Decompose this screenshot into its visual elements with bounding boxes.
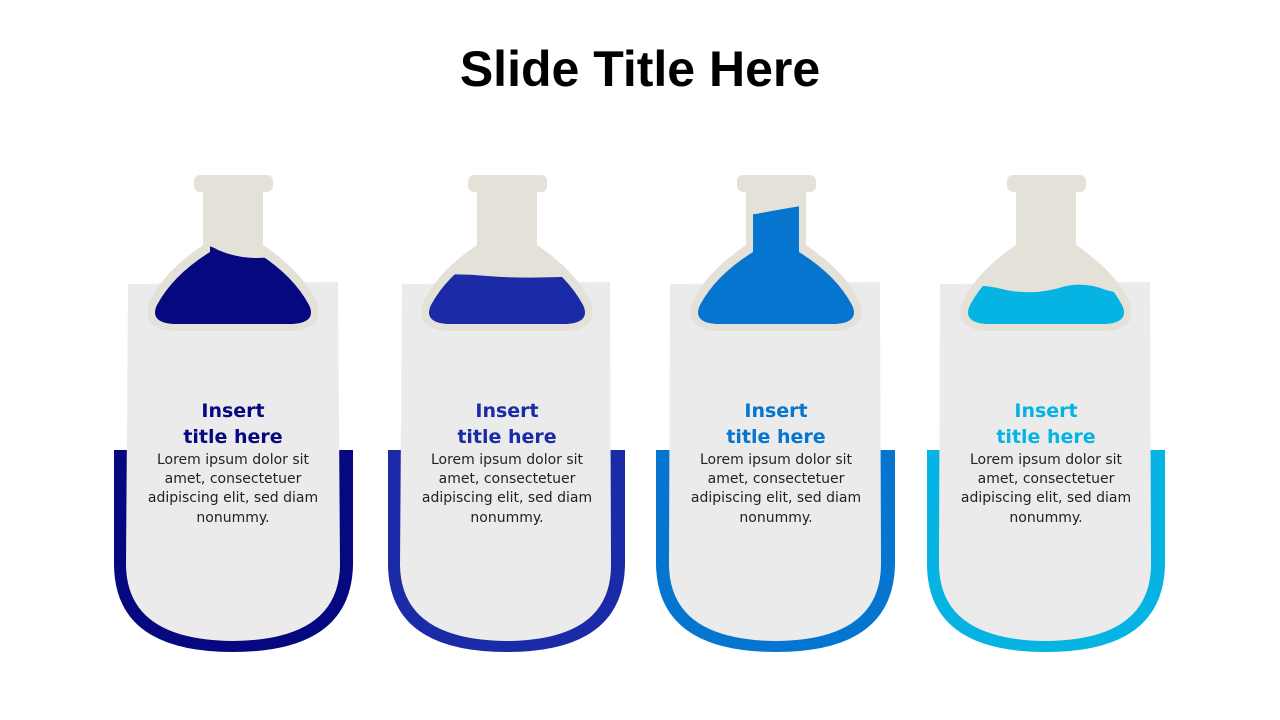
text block: nonummy. <box>739 510 813 526</box>
text block <box>961 400 1131 526</box>
text block <box>422 400 592 526</box>
text block: nonummy. <box>470 510 544 526</box>
text block: Lorem ipsum dolor sit <box>970 452 1123 468</box>
icon: flask <box>960 175 1132 331</box>
text block: nonummy. <box>196 510 270 526</box>
text block: title here <box>996 426 1096 448</box>
icon: flask <box>422 175 592 331</box>
panel: 1 <box>114 175 353 652</box>
text block <box>691 400 861 526</box>
text block: adipiscing elit, sed diam <box>691 490 861 506</box>
text block: adipiscing elit, sed diam <box>961 490 1131 506</box>
text block: title here <box>183 426 283 448</box>
text block: adipiscing elit, sed diam <box>148 490 318 506</box>
text block <box>148 400 318 526</box>
icon: flask <box>148 175 318 331</box>
text block: Insert <box>201 400 265 422</box>
text block: amet, consectetuer <box>708 471 845 487</box>
panel: 2 <box>388 175 625 652</box>
text block: Lorem ipsum dolor sit <box>157 452 310 468</box>
text block: amet, consectetuer <box>165 471 302 487</box>
icon: flask <box>690 175 862 331</box>
text block: Lorem ipsum dolor sit <box>700 452 853 468</box>
panel: 4 <box>927 175 1165 652</box>
text block: Insert <box>744 400 808 422</box>
text block: amet, consectetuer <box>978 471 1115 487</box>
text block: Insert <box>1014 400 1078 422</box>
text block: title here <box>726 426 826 448</box>
text block: amet, consectetuer <box>439 471 576 487</box>
text block: nonummy. <box>1009 510 1083 526</box>
title: Slide Title Here <box>460 41 820 97</box>
text block: Lorem ipsum dolor sit <box>431 452 584 468</box>
text block: adipiscing elit, sed diam <box>422 490 592 506</box>
text block: Insert <box>475 400 539 422</box>
text block: title here <box>457 426 557 448</box>
panel: 3 <box>656 175 895 652</box>
